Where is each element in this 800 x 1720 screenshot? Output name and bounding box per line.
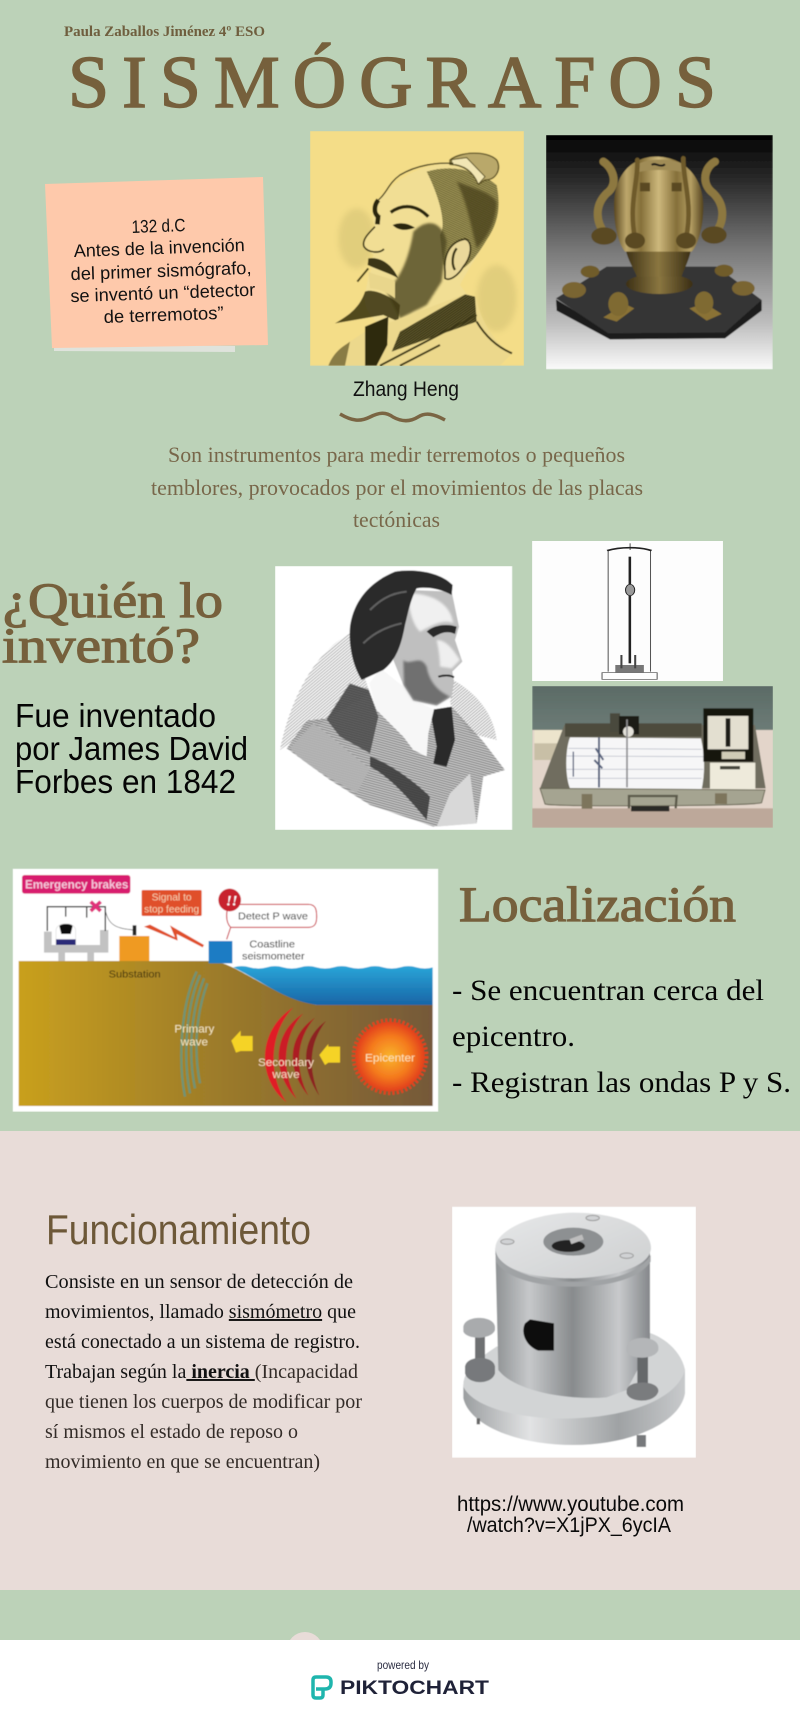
title: SISMÓGRAFOS — [68, 42, 716, 124]
text: localization points — [452, 974, 791, 1099]
substation — [119, 936, 149, 961]
hatching halo — [280, 633, 370, 750]
heading: who invented it: ¿Quién lo — [3, 572, 223, 628]
seismometer box — [209, 941, 232, 963]
secondary wave: Secondary — [258, 1057, 315, 1069]
text: video link — [457, 1493, 684, 1537]
vase lower bowl — [625, 245, 692, 277]
footer: powered by: powered by — [377, 1658, 429, 1672]
callout: detect P wave: !! — [226, 894, 237, 910]
panel: footer — [0, 1640, 800, 1720]
hatch halo around face — [338, 208, 375, 268]
callout: detect P wave — [218, 889, 317, 939]
cheek shading — [387, 223, 447, 318]
panel: functioning band — [0, 1131, 800, 1590]
forehead outline — [378, 163, 453, 200]
intro paragraph: tectónicas — [353, 507, 440, 532]
hair — [350, 570, 453, 680]
text: localization points: epicentro. — [452, 1020, 575, 1053]
panel: sticky note 132 d.C — [45, 177, 268, 352]
label: coastline seismometer: Coastline — [249, 939, 295, 950]
label: coastline seismometer: seismometer — [242, 951, 305, 962]
text: functioning description: Trabajan según la inercia (Incapacidad — [45, 1362, 358, 1383]
heading: localization: Localización — [459, 876, 736, 932]
text: localization points: - Se encuentran cerca del — [452, 974, 764, 1007]
primary wave: Primary — [174, 1024, 215, 1036]
text: video link: /watch?v=X1jPX_6ycIA — [467, 1514, 671, 1537]
label: signal to stop feeding: Signal to — [152, 893, 192, 904]
brows and eyes — [375, 200, 378, 217]
coat — [287, 685, 505, 827]
vase body — [614, 157, 703, 252]
note text: 132 d.C — [131, 215, 186, 237]
side window — [523, 1319, 554, 1351]
label: substation: Substation — [109, 969, 161, 980]
eye and mouth — [427, 625, 457, 637]
case interior — [540, 725, 766, 788]
text: functioning description — [45, 1272, 363, 1473]
chart: earthquake early warning diagram — [13, 869, 438, 1112]
text: functioning description: movimiento en que se encuentran) — [45, 1452, 320, 1473]
latches and handle — [582, 794, 592, 809]
text: video link: https://www.youtube.com — [457, 1493, 684, 1516]
secondary wave — [258, 1007, 326, 1102]
image: drum recorder seismograph — [532, 686, 773, 828]
caption: Zhang Heng: Zhang Heng — [353, 378, 459, 401]
dragons — [598, 158, 722, 238]
image: pendulum seismograph engraving — [532, 541, 723, 681]
heading: who invented it: inventó? — [2, 617, 200, 673]
decorated band — [639, 160, 682, 172]
footer: piktochart wordmark: PIKTOCHART — [340, 1678, 489, 1699]
cravat — [369, 668, 434, 757]
image: metal seismometer sensor — [452, 1207, 696, 1458]
heading: who invented it — [2, 572, 223, 673]
label: signal to stop feeding: stop feeding — [144, 905, 199, 916]
paper holder on the left — [534, 730, 562, 743]
text: functioning description: que tienen los cuerpos de modificar por — [45, 1392, 363, 1413]
heading: functioning: Funcionamiento — [46, 1206, 311, 1253]
text: functioning description: movimientos, llamado sismómetro que — [45, 1302, 356, 1323]
image: portrait of Zhang Heng — [310, 131, 524, 366]
base plate — [463, 1332, 685, 1445]
decorative circle behind footer — [287, 1632, 323, 1668]
image: portrait of James David Forbes — [275, 566, 512, 830]
head base — [364, 163, 498, 338]
face — [393, 590, 462, 706]
moustache and beard — [368, 258, 398, 278]
rear hair shading — [427, 168, 499, 272]
text: inventor: Forbes en 1842 — [15, 763, 236, 800]
primary wave — [174, 972, 215, 1097]
secondary wave: wave — [271, 1069, 300, 1081]
epicenter: Epicenter — [365, 1052, 415, 1064]
hexagonal base — [556, 267, 762, 339]
text: functioning description: sí mismos el estado de reposo o — [45, 1422, 298, 1443]
ground — [19, 961, 433, 1106]
robe — [328, 293, 512, 366]
epicenter — [354, 1021, 426, 1093]
hair knot — [450, 153, 499, 184]
nose outline — [364, 227, 384, 252]
intro paragraph: Son instrumentos para medir terremotos o pequeños — [168, 442, 625, 467]
text: inventor — [15, 697, 248, 800]
label: emergency brakes — [22, 875, 130, 894]
note text: se inventó un “detector — [70, 280, 256, 306]
text: inventor: por James David — [15, 730, 248, 767]
note text: de terremotos” — [103, 303, 224, 327]
callout: detect P wave: Detect P wave — [238, 912, 308, 923]
wavy divider — [340, 413, 445, 421]
case front — [540, 788, 765, 806]
intro paragraph: temblores, provocados por el movimientos de las placas — [151, 475, 643, 500]
primary wave: wave — [180, 1036, 208, 1048]
label: coastline seismometer — [242, 939, 305, 962]
note text: del primer sismógrafo, — [70, 258, 252, 284]
intro paragraph — [151, 442, 643, 532]
sensor top opening — [543, 1228, 603, 1256]
text: functioning description: está conectado a un sistema de registro. — [45, 1332, 360, 1353]
note text: Antes de la invención — [73, 235, 245, 261]
toads — [562, 265, 755, 322]
icon: piktochart logo — [313, 1677, 331, 1698]
text: inventor: Fue inventado — [15, 697, 216, 734]
foot of vase — [626, 274, 693, 294]
sea — [233, 966, 433, 1005]
screws — [501, 1215, 633, 1258]
viaduct and train — [44, 902, 133, 961]
text: functioning description: Consiste en un sensor de detección de — [45, 1272, 353, 1293]
drum paper — [566, 737, 704, 789]
label: signal to stop feeding — [142, 890, 202, 916]
cylinder — [495, 1248, 650, 1398]
text: localization points: - Registran las ondas P y S. — [452, 1066, 791, 1099]
note text — [68, 213, 256, 328]
author line: Paula Zaballos Jiménez 4º ESO — [64, 24, 265, 40]
ear — [445, 239, 470, 279]
knobs — [463, 1318, 658, 1401]
image: bronze seismoscope — [546, 135, 773, 369]
arrow: signal lightning — [144, 925, 204, 947]
arrows: wave direction — [231, 1031, 340, 1065]
label: emergency brakes: Emergency brakes — [25, 879, 128, 892]
control panels — [703, 708, 753, 762]
